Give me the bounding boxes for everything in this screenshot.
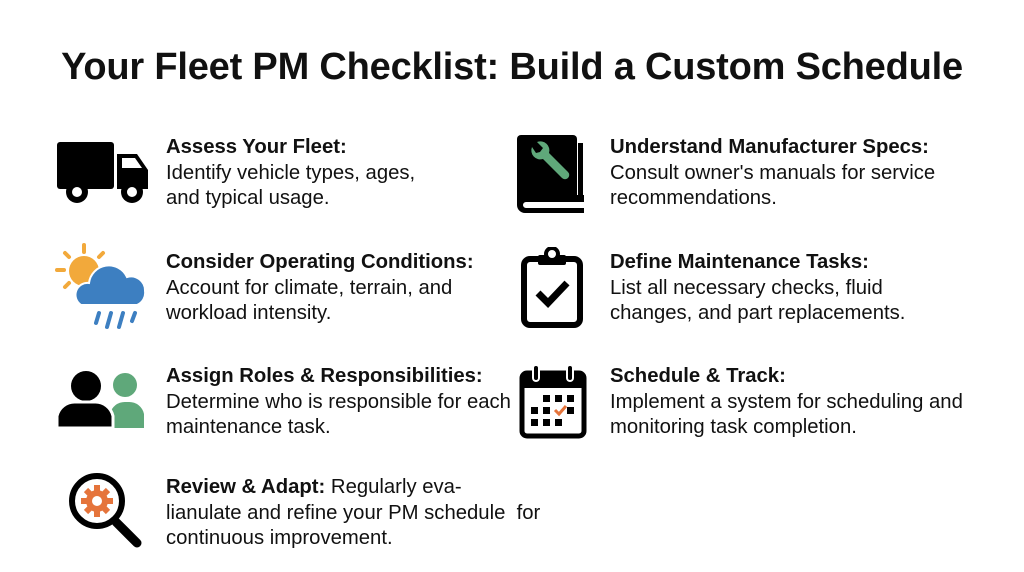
text: schedule bbox=[610, 365, 963, 438]
text: schedule: Schedule & Track: bbox=[610, 365, 786, 387]
icon: manual book bbox=[517, 135, 584, 213]
icon: weather bbox=[55, 243, 144, 329]
text: schedule: monitoring task completion. bbox=[610, 416, 857, 438]
icon: truck bbox=[57, 142, 148, 203]
text: manufacturer: Understand Manufacturer Specs: bbox=[610, 136, 929, 158]
text: conditions: Consider Operating Conditions: bbox=[166, 251, 474, 273]
text: roles bbox=[166, 365, 511, 438]
icon: calendar bbox=[520, 366, 586, 438]
text: assess: Identify vehicle types, ages, bbox=[166, 162, 415, 184]
text: assess: Assess Your Fleet: bbox=[166, 136, 347, 158]
text: review: Review & Adapt: Regularly eva- bbox=[166, 476, 462, 498]
text: assess: and typical usage. bbox=[166, 187, 330, 209]
text: schedule: Implement a system for scheduling and bbox=[610, 390, 963, 412]
text: manufacturer: Consult owner's manuals for service bbox=[610, 162, 935, 184]
text: manufacturer bbox=[610, 136, 935, 209]
icon: people bbox=[58, 371, 144, 428]
text: review: lianulate and refine your PM schedule for bbox=[166, 502, 540, 524]
text: tasks: Define Maintenance Tasks: bbox=[610, 251, 869, 273]
text: manufacturer: recommendations. bbox=[610, 187, 777, 209]
text: assess bbox=[166, 136, 415, 209]
icon: magnifier gear bbox=[69, 473, 142, 548]
title: Your Fleet PM Checklist: Build a Custom Schedule bbox=[61, 46, 963, 88]
text: roles: maintenance task. bbox=[166, 416, 331, 438]
text: conditions bbox=[166, 251, 474, 324]
text: conditions: Account for climate, terrain, and bbox=[166, 276, 452, 298]
text: tasks: List all necessary checks, fluid bbox=[610, 276, 883, 298]
icon: clipboard bbox=[521, 247, 583, 328]
text: roles: Assign Roles & Responsibilities: bbox=[166, 365, 483, 387]
text: tasks bbox=[610, 251, 905, 324]
text: roles: Determine who is responsible for each bbox=[166, 390, 511, 412]
text: conditions: workload intensity. bbox=[166, 302, 331, 324]
text: review bbox=[166, 476, 540, 549]
text: tasks: changes, and part replacements. bbox=[610, 302, 905, 324]
text: review: continuous improvement. bbox=[166, 527, 393, 549]
